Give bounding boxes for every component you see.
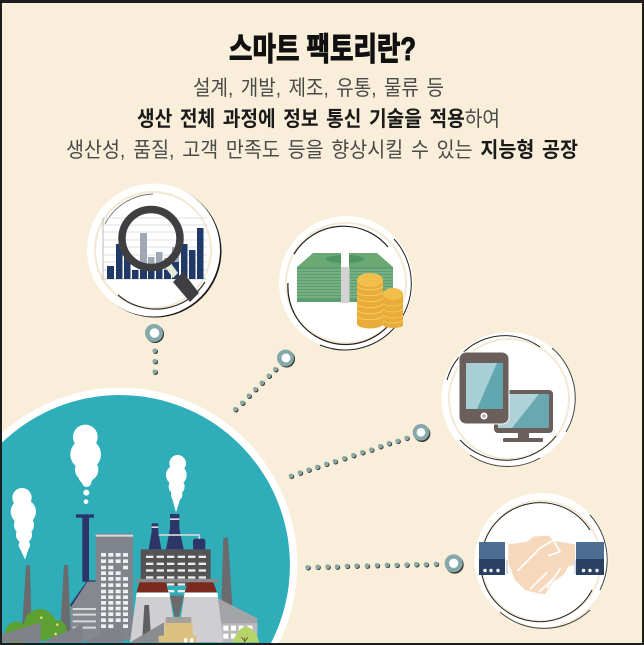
green hills	[5, 609, 67, 645]
panel: devices circle	[442, 332, 576, 466]
right annex	[218, 598, 257, 642]
description text: 생산 전체 과정에 정보 통신 기술을 적용하여	[137, 108, 500, 131]
grey foreground roofs	[0, 622, 123, 642]
icon: tablet	[459, 352, 509, 424]
icon: bar chart	[101, 218, 207, 279]
panel: factory circle	[0, 388, 297, 645]
cooling towers	[136, 579, 218, 582]
dark plant block	[141, 549, 211, 586]
title: 스마트 팩토리란?	[229, 31, 416, 67]
panel: money circle	[279, 216, 413, 350]
grey tall building	[96, 534, 133, 640]
icon: left smoke	[11, 488, 36, 560]
illustration: factory	[0, 425, 259, 645]
tan building	[166, 617, 191, 624]
icon: right smoke	[166, 455, 187, 512]
icon: gold coins	[357, 273, 403, 328]
description text: 생산성, 품질, 고객 만족도 등을 향상시킬 수 있는 지능형 공장	[66, 139, 578, 162]
connector: dotted line to devices circle	[289, 424, 430, 479]
icon: middle smoke	[70, 425, 101, 504]
icon: handshake	[479, 536, 604, 594]
navy stacks	[149, 514, 205, 550]
foreground chimney	[142, 605, 151, 642]
description text	[66, 77, 578, 162]
connector: dotted line to money circle	[233, 350, 295, 412]
icon: banknotes	[297, 253, 393, 303]
icon: magnifying glass	[122, 210, 199, 302]
description text: 설계, 개발, 제조, 유통, 물류 등	[193, 77, 444, 100]
chimneys	[22, 538, 232, 633]
panel: data analysis circle	[87, 184, 222, 318]
icon: monitor	[494, 390, 553, 442]
connector: dotted line to handshake circle	[305, 554, 464, 574]
green tree	[232, 627, 259, 642]
panel: handshake circle	[474, 493, 608, 628]
connector: dotted line to data circle	[145, 324, 164, 375]
navy pipe	[70, 514, 97, 608]
